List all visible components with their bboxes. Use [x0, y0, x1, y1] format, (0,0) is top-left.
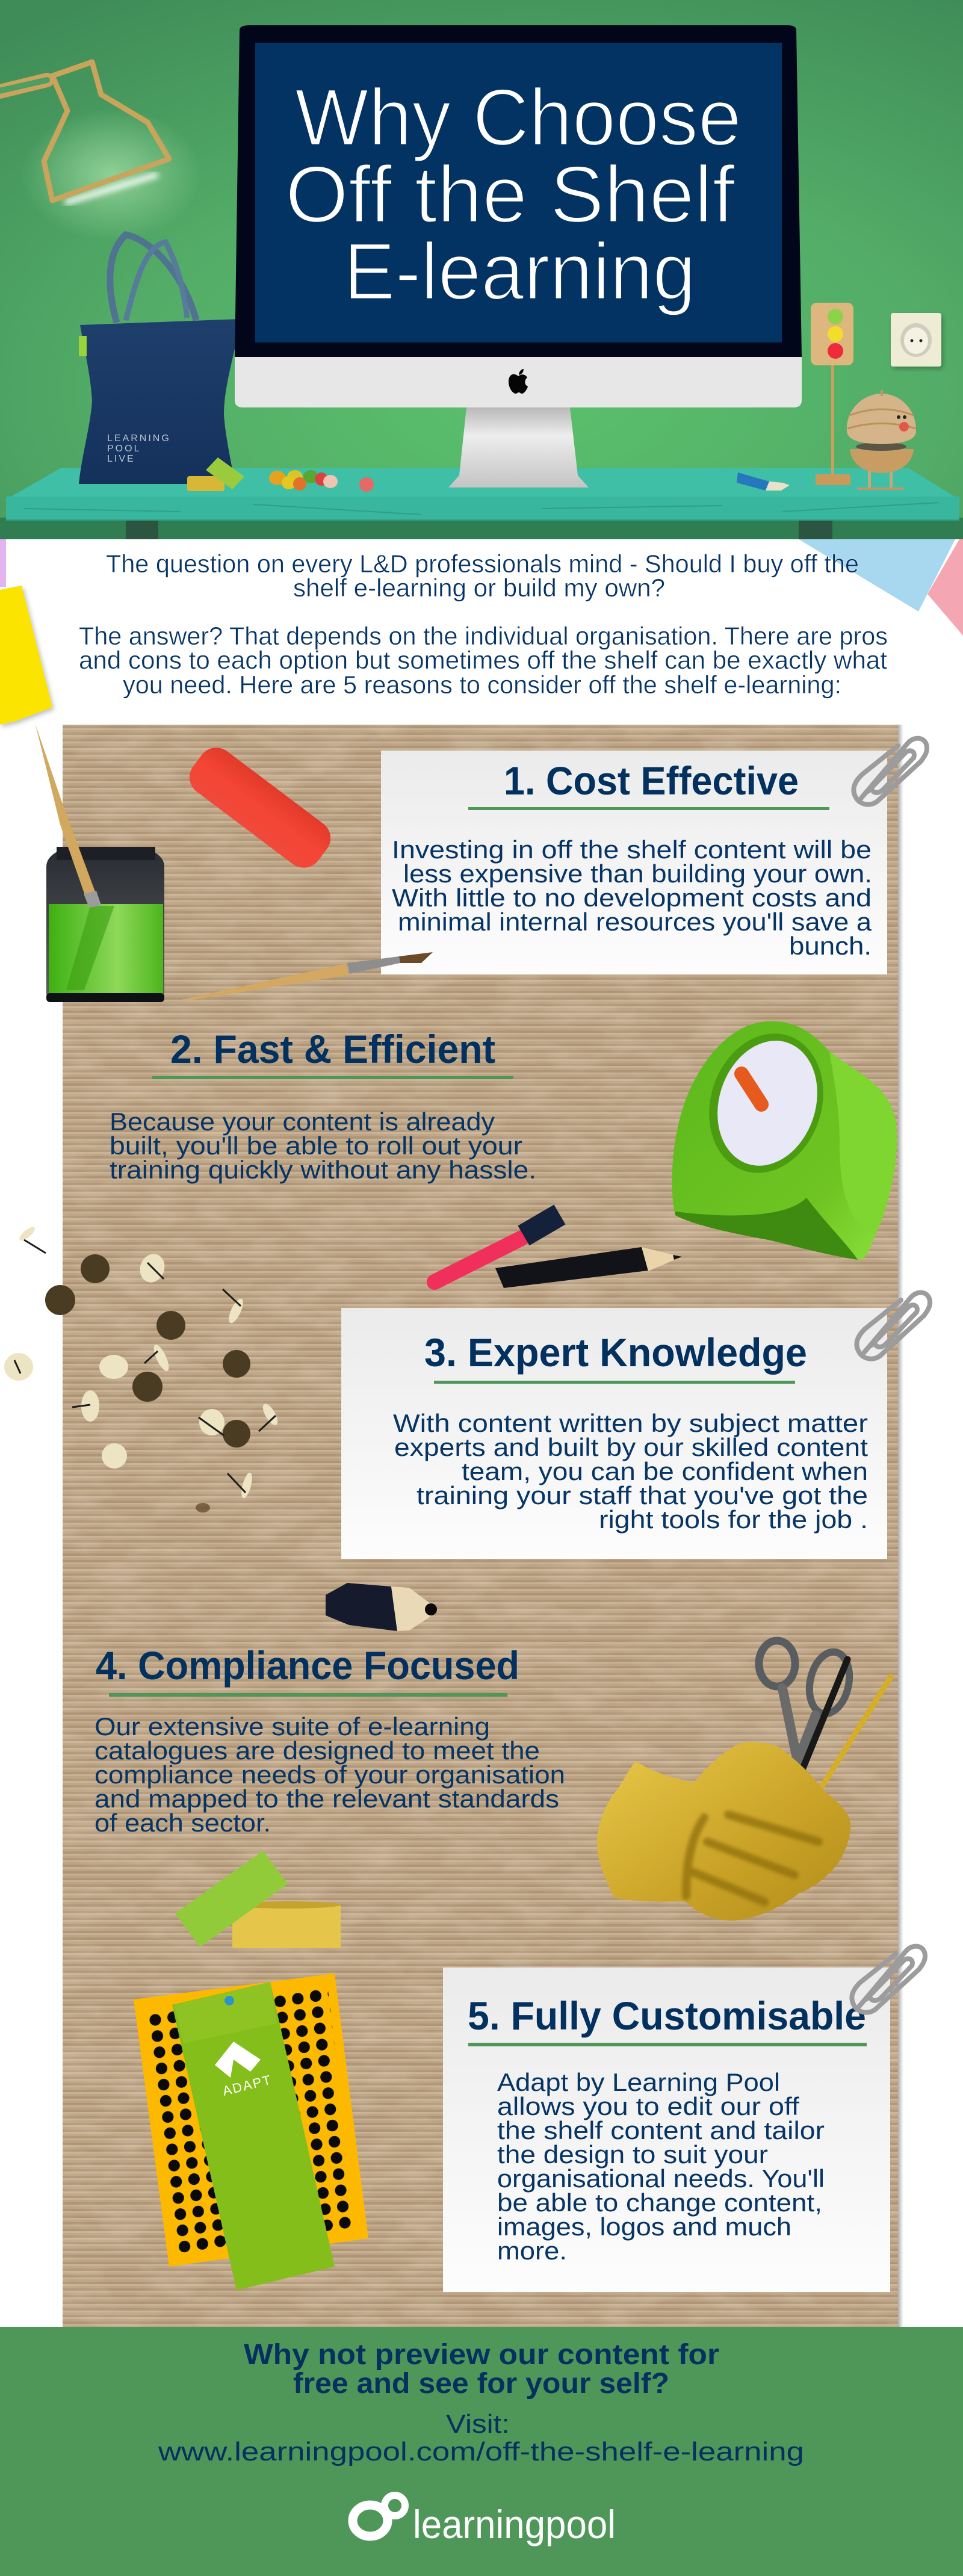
text block: fully customisable: Adapt by Learning Pool [497, 2068, 780, 2096]
text block: cost effective: less expensive than building your own. [403, 859, 872, 888]
text block: compliance focused: and mapped to the relevant standards [94, 1785, 559, 1813]
logo: learningpool [353, 2495, 616, 2547]
icon: red crayon [182, 740, 338, 875]
icon: tote bag: POOL [107, 444, 141, 454]
icon: monitor [235, 25, 802, 488]
text block: expert knowledge: right tools for the job . [599, 1505, 868, 1534]
title: E-learning [344, 227, 696, 317]
icon: green paint jar with brush [36, 725, 164, 1002]
text block: expert knowledge [393, 1409, 868, 1534]
icon: scattered pins [4, 1225, 280, 1512]
text block: introduction: shelf e-learning or build my own? [293, 574, 665, 602]
text block: introduction: The answer? That depends on the individual organisation. There are pros [79, 622, 888, 650]
text block: fully customisable: images, logos and much [497, 2212, 791, 2241]
text block: expert knowledge: team, you can be confident when [462, 1457, 868, 1485]
title: Why Choose [295, 73, 742, 163]
icon: paint brush [181, 952, 433, 1000]
text block: fast and efficient: training quickly without any hassle. [110, 1156, 536, 1184]
text block: expert knowledge: experts and built by our skilled content [394, 1433, 868, 1461]
text block: visit link [158, 2409, 804, 2466]
text block: fully customisable [497, 2068, 825, 2265]
heading: preview question [244, 2339, 719, 2400]
icon: wooden egg toy [847, 390, 916, 490]
text block: fully customisable: the design to suit your [497, 2140, 768, 2169]
text block: fully customisable: more. [497, 2237, 567, 2265]
icon: black pencil [495, 1247, 682, 1288]
heading: expert knowledge: 3. Expert Knowledge [424, 1330, 807, 1375]
text block: compliance focused: Our extensive suite of e-learning [94, 1712, 490, 1741]
text block: fully customisable: organisational needs. You'll [497, 2164, 825, 2193]
text block: introduction: you need. Here are 5 reasons to consider off the shelf e-learning: [123, 670, 841, 699]
text block: fast and efficient: Because your content is already [110, 1107, 495, 1136]
text block: cost effective: Investing in off the shelf content will be [392, 835, 872, 864]
panel: 2 fast and efficient [110, 1027, 536, 1184]
text block: expert knowledge: With content written by subject matter [393, 1409, 868, 1437]
icon: tote bag [79, 235, 241, 484]
icon: paperclip 5 [852, 1946, 925, 2013]
panel: hero desk scene [0, 0, 963, 539]
text block: fully customisable: the shelf content and tailor [497, 2116, 825, 2144]
text block: cost effective: With little to no development costs and [392, 884, 872, 912]
shelf [0, 468, 963, 539]
title [285, 73, 742, 317]
heading: preview question: Why not preview our content for [244, 2339, 719, 2371]
icon: orange pegboard and adapt tag [134, 1974, 368, 2290]
panel: 3 expert knowledge [341, 1308, 887, 1559]
icon: tote bag: LEARNING [107, 433, 171, 444]
icon: red marker [435, 1215, 560, 1282]
icon: apple logo [509, 369, 528, 394]
text block: cost effective [392, 835, 872, 960]
icon: green and yellow tape [175, 1851, 341, 1948]
icon: paperclip 1 [853, 738, 927, 805]
icon: wooden traffic light [811, 303, 853, 485]
icon: scissors and pencils [759, 1641, 891, 1790]
text block: fast and efficient [110, 1107, 536, 1184]
icon: pencil stub [326, 1583, 437, 1631]
heading: fully customisable: 5. Fully Customisable [468, 1993, 866, 2038]
panel: cardboard background [63, 725, 903, 2327]
text block: compliance focused [94, 1712, 565, 1837]
text block: introduction [79, 550, 888, 699]
text block: expert knowledge: training your staff that you've got the [416, 1481, 868, 1509]
heading: preview question: free and see for your self? [293, 2368, 669, 2400]
panel: 5 fully customisable [443, 1968, 890, 2292]
heading: cost effective: 1. Cost Effective [504, 758, 799, 803]
panel: footer call to action [0, 2327, 963, 2576]
icon: orange pegboard and adapt tag: ADAPT [221, 2072, 273, 2099]
text block: fully customisable: allows you to edit our off [497, 2092, 799, 2120]
heading: compliance focused: 4. Compliance Focused [96, 1643, 519, 1688]
text block: compliance focused: compliance needs of your organisation [94, 1760, 565, 1789]
icon: green clock [672, 1018, 897, 1260]
text block: introduction: The question on every L&D professionals mind - Should I buy off the [106, 550, 859, 578]
panel: 1 cost effective [381, 751, 887, 974]
title: Off the Shelf [285, 150, 735, 240]
decor: paper bunting and sticky note [0, 539, 963, 725]
text block: introduction: and cons to each option but sometimes off the shelf can be exactly what [79, 646, 887, 674]
panel: 4 compliance focused [94, 1643, 565, 1837]
icon: desk lamp [0, 62, 202, 241]
icon: paperclip 3 [856, 1293, 930, 1359]
text block: cost effective: minimal internal resources you'll save a [398, 908, 872, 936]
logo: learningpool: learningpool [413, 2502, 616, 2547]
icon: yellow fist [597, 1742, 850, 1921]
text block: cost effective: bunch. [789, 932, 872, 960]
icon: tote bag: LIVE [107, 454, 135, 464]
icon: blue crayon [737, 472, 790, 491]
heading: fast and efficient: 2. Fast & Efficient [170, 1027, 495, 1071]
text block: visit link: www.learningpool.com/off-the-shelf-e-learning [158, 2437, 804, 2466]
text block: fast and efficient: built, you'll be able to roll out your [110, 1132, 522, 1160]
text block: compliance focused: of each sector. [94, 1809, 271, 1837]
icon: tape on shelf [187, 457, 244, 491]
text block: visit link: Visit: [446, 2409, 510, 2439]
text block: compliance focused: catalogues are designed to meet the [94, 1736, 540, 1765]
text block: fully customisable: be able to change content, [497, 2188, 822, 2217]
icon: candies [269, 470, 374, 492]
icon: wall socket [891, 313, 941, 367]
